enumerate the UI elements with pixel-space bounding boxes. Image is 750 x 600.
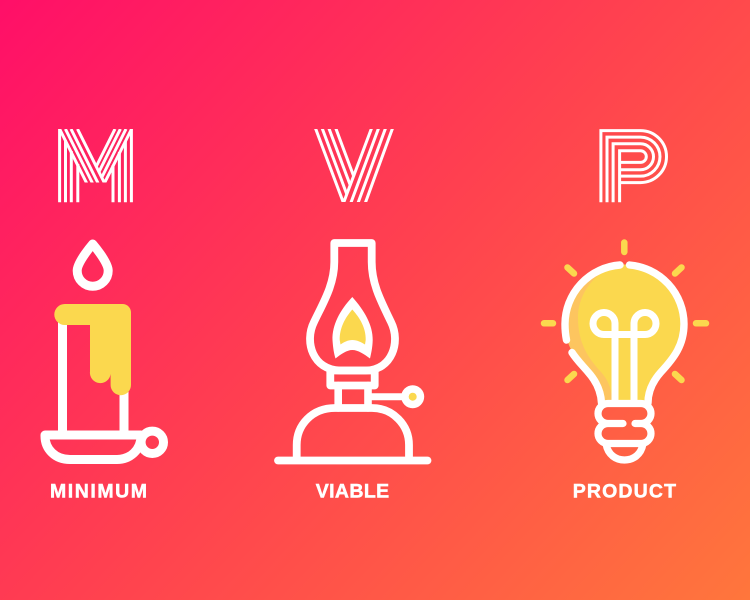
melted wax	[54, 304, 131, 395]
bulb glass shade	[565, 264, 684, 404]
letter V	[315, 127, 393, 203]
light rays	[544, 242, 706, 380]
lamp collar	[330, 370, 375, 386]
bulb glass highlight	[578, 264, 684, 404]
screw base	[598, 404, 651, 444]
letter P	[601, 131, 667, 202]
lamp ground line	[278, 457, 428, 464]
label: minimum: MINIMUM	[50, 480, 147, 502]
icon: oil lamp	[278, 243, 428, 460]
candle dish	[45, 435, 141, 460]
candle body	[62, 318, 124, 432]
letter M	[60, 129, 132, 203]
lamp neck	[338, 386, 368, 408]
dish handle ring	[141, 431, 164, 453]
candle flame drop	[77, 244, 108, 286]
bulb outline	[565, 265, 684, 403]
lamp flame outer	[332, 297, 373, 358]
label: viable: VIABLE	[316, 480, 389, 502]
label: product: PRODUCT	[573, 480, 676, 502]
icon: candle	[45, 244, 164, 460]
filament	[593, 312, 656, 403]
lamp dome base	[297, 408, 409, 460]
bulb tip	[606, 444, 643, 460]
lamp flame inner	[340, 310, 366, 344]
lamp glass chimney	[310, 243, 395, 370]
icon: light bulb	[544, 242, 706, 460]
lamp control knob	[368, 385, 424, 408]
